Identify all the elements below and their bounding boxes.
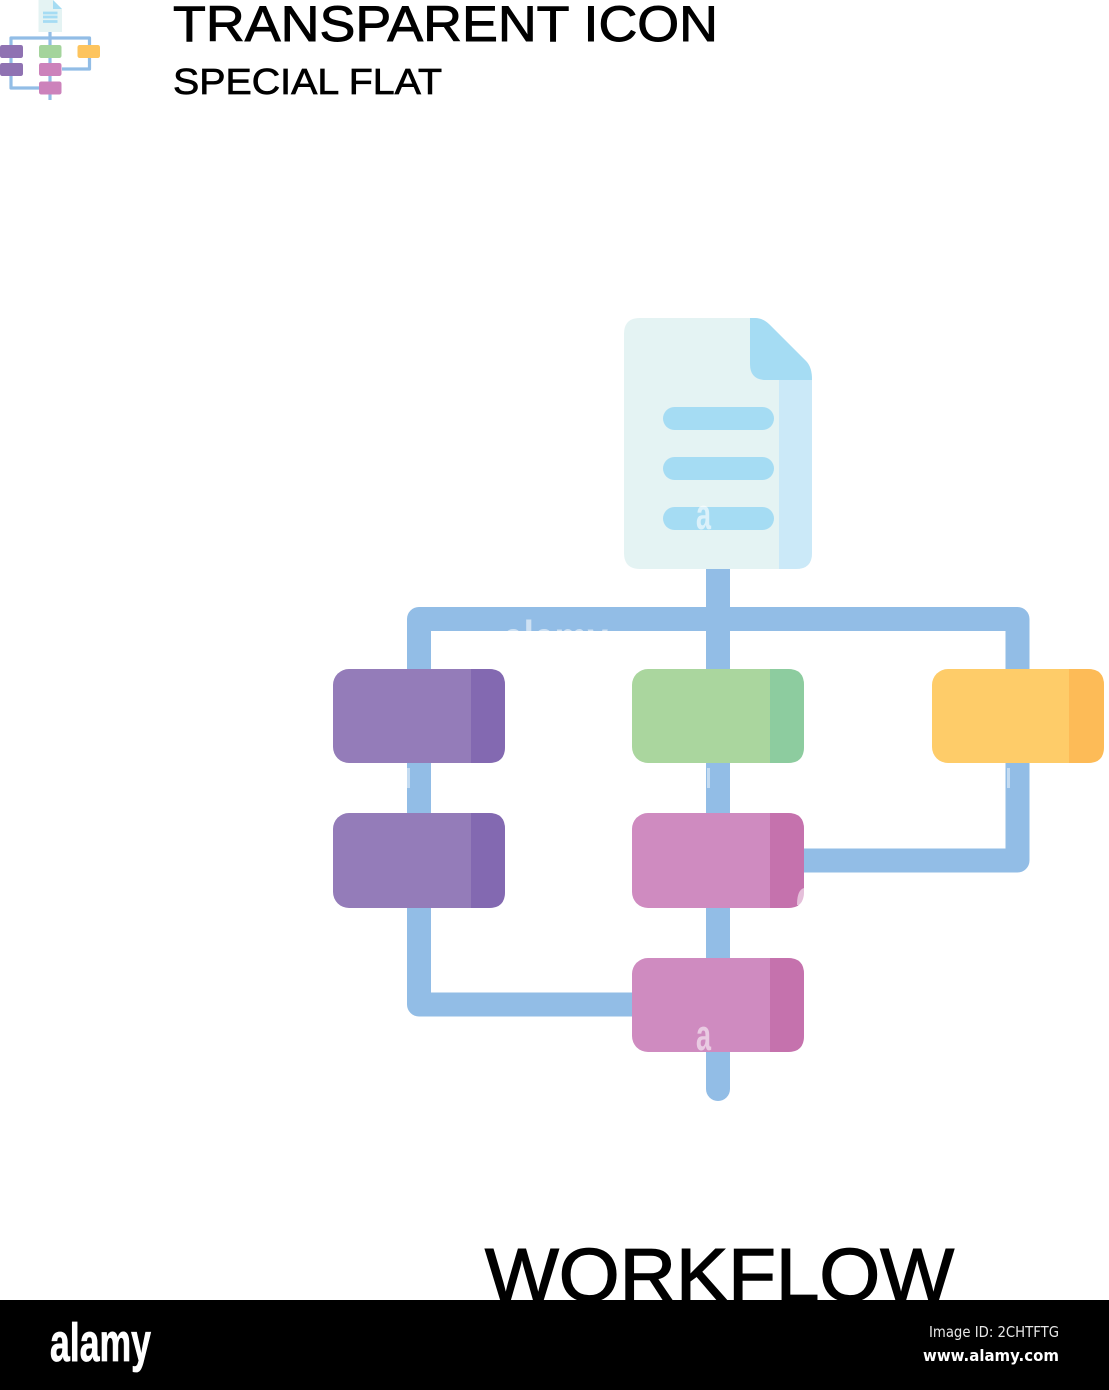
pink box bottom — [632, 958, 804, 1052]
image id: Image ID: 2CHTFTG — [929, 1323, 1059, 1341]
green box — [632, 669, 804, 763]
purple box bottom — [333, 813, 505, 908]
watermark traces: a — [696, 490, 711, 539]
icon: main workflow diagram — [333, 318, 1104, 1089]
watermark traces: alamy — [503, 611, 608, 667]
title: workflow: WORKFLOW — [485, 1233, 954, 1317]
subheading: special flat: SPECIAL FLAT — [173, 61, 442, 102]
document — [624, 318, 812, 569]
footer bar — [0, 1300, 1109, 1390]
purple box top — [333, 669, 505, 763]
connector lines — [419, 569, 1018, 1089]
watermark traces — [407, 490, 1010, 1060]
website: www.alamy.com — [923, 1346, 1059, 1365]
yellow box — [932, 669, 1104, 763]
icon: small workflow thumbnail — [0, 0, 100, 100]
watermark traces: a — [696, 1011, 711, 1060]
logo: alamy: alamy — [50, 1313, 151, 1373]
pink box middle — [632, 813, 804, 908]
